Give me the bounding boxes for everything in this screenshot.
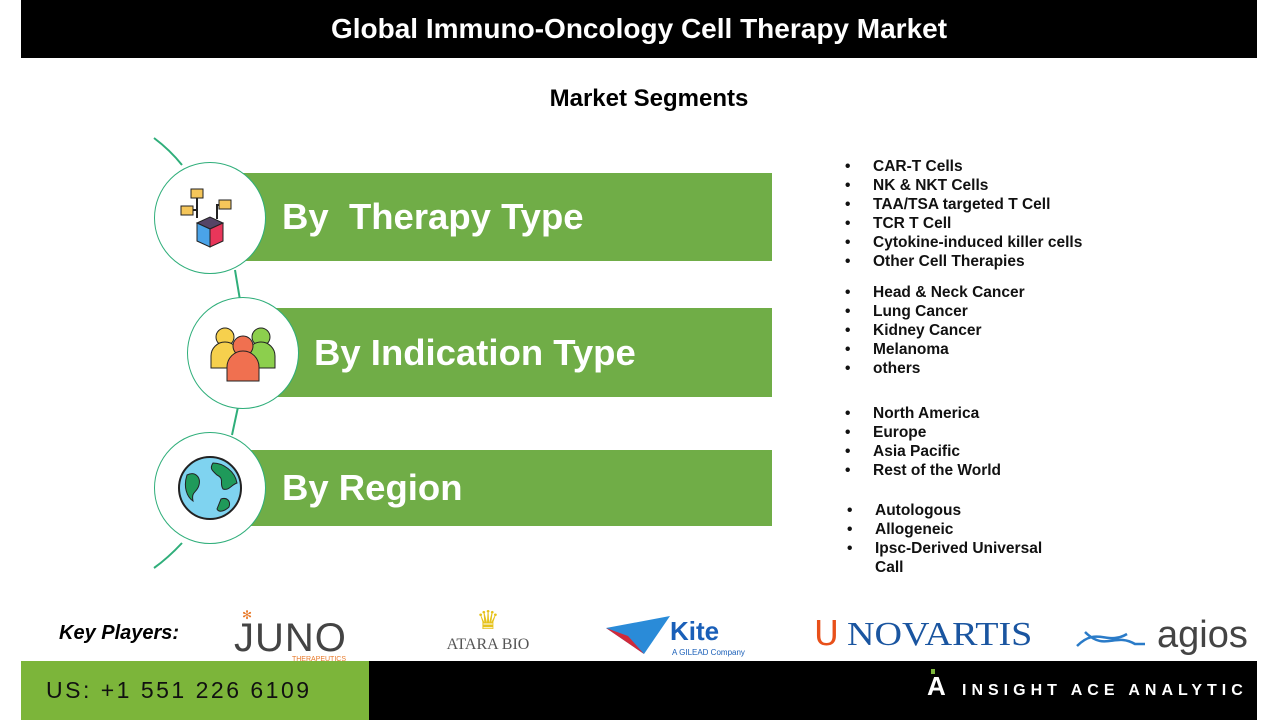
text: Call — [875, 559, 903, 576]
footer phone: US: +1 551 226 6109 — [46, 677, 312, 703]
list: therapy types: CAR-T Cells — [873, 158, 963, 175]
logo: atara: ♛ — [476, 606, 500, 635]
list: therapy types: TAA/TSA targeted T Cell — [873, 196, 1050, 213]
key players label: Key Players: — [59, 622, 179, 644]
list: therapy types: Other Cell Therapies — [873, 253, 1025, 270]
header bar — [21, 0, 1257, 58]
icon: cube circle — [154, 162, 266, 274]
list: source: Allogeneic — [875, 521, 953, 538]
logo: kite: A GILEAD Company — [672, 648, 745, 657]
list: therapy types: NK & NKT Cells — [873, 177, 988, 194]
bar: region — [240, 450, 772, 526]
logo: kite — [606, 616, 745, 657]
list: regions — [846, 405, 1001, 479]
list: therapy types — [846, 158, 1082, 270]
bar: indication type: By Indication Type — [314, 332, 636, 372]
logo: juno: JUNO — [234, 616, 347, 660]
logo: agios: agios — [1157, 614, 1248, 656]
footer brand: INSIGHT ACE ANALYTIC — [962, 682, 1248, 699]
list: source — [848, 502, 1042, 576]
icon: people circle — [187, 297, 299, 409]
footer phone — [21, 661, 369, 720]
list: regions: Rest of the World — [873, 462, 1001, 479]
footer brand — [369, 661, 1257, 720]
list: regions: North America — [873, 405, 979, 422]
bar: indication type — [272, 308, 772, 397]
list: indications: Head & Neck Cancer — [873, 284, 1025, 301]
list: indications: others — [873, 360, 920, 377]
list: source: Ipsc-Derived Universal — [875, 540, 1042, 557]
logo: kite: Kite — [670, 616, 719, 646]
bar: therapy type — [240, 173, 772, 261]
list: therapy types: TCR T Cell — [873, 215, 951, 232]
list: indications — [846, 284, 1025, 377]
connector line — [154, 137, 240, 569]
list: indications: Melanoma — [873, 341, 949, 358]
logo: agios — [1076, 614, 1248, 656]
logo: novartis: ᑌ — [814, 616, 839, 653]
footer brand: A — [927, 671, 946, 701]
header bar: Global Immuno-Oncology Cell Therapy Market — [331, 13, 947, 44]
logo: atara — [446, 606, 529, 653]
bar: therapy type: By Therapy Type — [282, 196, 584, 237]
list: indications: Kidney Cancer — [873, 322, 982, 339]
list: regions: Europe — [873, 424, 926, 441]
list: therapy types: Cytokine-induced killer cells — [873, 234, 1082, 251]
subtitle: Market Segments — [550, 85, 748, 112]
logo: juno: ✻ — [242, 608, 252, 622]
list: source: Autologous — [875, 502, 961, 519]
bar: region: By Region — [282, 467, 462, 508]
logo: juno: THERAPEUTICS — [292, 656, 346, 663]
list: indications: Lung Cancer — [873, 303, 968, 320]
list: regions: Asia Pacific — [873, 443, 960, 460]
logo: novartis: NOVARTIS — [847, 616, 1033, 653]
logo: atara: ATARA BIO — [447, 636, 529, 653]
icon: globe circle — [154, 432, 266, 544]
